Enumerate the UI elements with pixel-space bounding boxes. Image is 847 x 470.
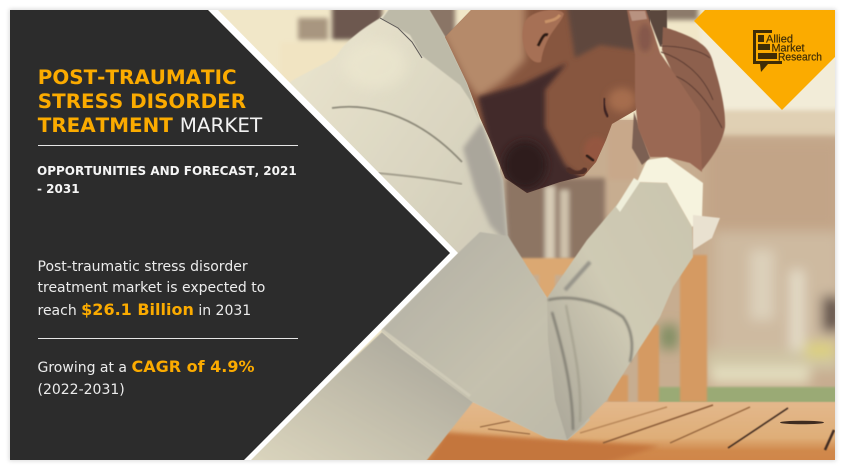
collar bbox=[382, 8, 480, 122]
jacket side shading bbox=[463, 122, 508, 245]
CAGR text: Growing at a bbox=[38, 360, 131, 376]
dark text panel bbox=[10, 10, 450, 460]
shadowed hair behind wrist bbox=[632, 112, 650, 165]
logo: Allied Market Research: Market bbox=[772, 42, 804, 54]
hair above fingers bbox=[650, 10, 668, 46]
forearm bbox=[547, 182, 693, 440]
beard bbox=[478, 63, 585, 196]
title rule bbox=[38, 145, 298, 146]
wooden chair bbox=[517, 255, 707, 402]
short hair bbox=[566, 10, 650, 58]
nostril bbox=[586, 155, 594, 161]
CAGR text: CAGR of 4.9% bbox=[131, 357, 255, 376]
man's head bbox=[445, 10, 650, 193]
hand holding head bbox=[627, 10, 725, 172]
fingers behind bbox=[662, 27, 725, 170]
mouth bbox=[567, 168, 586, 173]
market value text: Post-traumatic stress disorder bbox=[38, 259, 248, 275]
white chevron stripe bbox=[208, 10, 458, 460]
photo background: blurred garden bbox=[280, 10, 835, 402]
title: POST-TRAUMATIC bbox=[38, 66, 237, 89]
palm and thumb bbox=[627, 10, 702, 172]
title: STRESS DISORDER bbox=[38, 90, 246, 113]
upper arm resting on table bbox=[382, 232, 590, 440]
forehead light bbox=[608, 88, 636, 112]
title: TREATMENT MARKET bbox=[38, 114, 262, 137]
green grass band bbox=[656, 387, 838, 403]
photo: stressed man at a table bbox=[251, 10, 835, 460]
logo: Allied Market Research: Allied bbox=[766, 34, 793, 46]
subtitle: OPPORTUNITIES AND FORECAST, 2021 bbox=[37, 164, 297, 178]
market value text: treatment market is expected to bbox=[38, 280, 265, 296]
shirt cuff bbox=[616, 157, 720, 250]
subtitle: - 2031 bbox=[37, 182, 80, 196]
market value text: reach bbox=[38, 303, 81, 319]
logo: Allied Market Research bbox=[753, 30, 822, 72]
CAGR text: (2022-2031) bbox=[38, 382, 125, 398]
section rule bbox=[38, 338, 298, 339]
ear bbox=[522, 10, 564, 62]
man's torso and shoulder bbox=[290, 8, 590, 440]
nose bbox=[585, 138, 606, 162]
amber logo banner bbox=[694, 10, 835, 110]
lower torso bbox=[240, 332, 473, 465]
market value text: $26.1 Billion in 2031 bbox=[81, 300, 251, 319]
wooden table bbox=[426, 402, 835, 460]
table slats bbox=[480, 405, 834, 450]
band above lower torso bbox=[382, 330, 470, 396]
sleeve creases bbox=[332, 107, 462, 162]
logo: Allied Market Research: Research bbox=[778, 52, 822, 64]
neck highlight bbox=[445, 10, 529, 98]
sleeve folds bbox=[548, 262, 632, 430]
closed eye bbox=[604, 98, 608, 117]
